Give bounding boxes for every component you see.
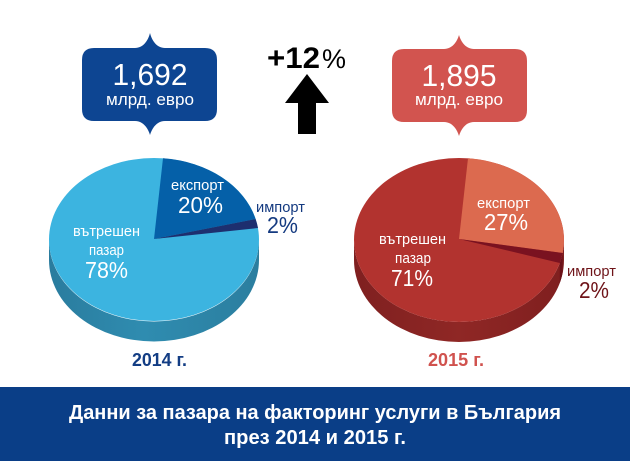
label: import 2%: 2%: [579, 277, 609, 303]
callout: 2015 value: 1,895: [422, 58, 496, 93]
label: export 20%: [171, 178, 224, 218]
label: domestic market 71%: 71%: [391, 265, 433, 291]
label: import 2%: [567, 264, 616, 303]
footer title: през 2014 и 2015 г.: [224, 427, 406, 449]
footer banner: [0, 387, 630, 461]
growth figure: [267, 42, 346, 75]
pie chart: 2014: [49, 158, 305, 341]
callout: 2014 value: млрд. евро: [106, 90, 194, 109]
label: domestic market 78%: вътрешен: [73, 224, 140, 240]
label: import 2%: импорт: [567, 264, 616, 280]
year label: 2015: 2015 г.: [428, 350, 484, 370]
growth figure: +12: [267, 42, 320, 75]
label: import 2%: [256, 200, 305, 238]
label: export 20%: експорт: [171, 178, 224, 194]
label: export 27%: експорт: [477, 196, 530, 212]
footer title: Данни за пазара на факторинг услуги в България: [69, 402, 561, 424]
label: domestic market 71%: [379, 232, 446, 291]
label: domestic market 78%: [73, 224, 140, 283]
label: export 27%: [477, 196, 530, 235]
label: export 20%: 20%: [178, 192, 223, 218]
label: domestic market 78%: пазар: [89, 243, 124, 259]
label: domestic market 71%: пазар: [395, 251, 431, 267]
callout: 2015 value: [392, 35, 527, 136]
footer title: [69, 402, 561, 449]
label: export 27%: 27%: [484, 209, 528, 235]
label: domestic market 71%: вътрешен: [379, 232, 446, 248]
callout: 2014 value: [82, 33, 217, 135]
label: import 2%: 2%: [267, 212, 298, 238]
year label: 2014: 2014 г.: [132, 350, 187, 370]
label: import 2%: импорт: [256, 200, 305, 216]
label: domestic market 78%: 78%: [85, 257, 128, 283]
growth figure: %: [322, 44, 346, 74]
callout: 2015 value: млрд. евро: [415, 90, 503, 109]
pie chart: 2015: [354, 158, 616, 342]
callout: 2014 value: 1,692: [112, 57, 188, 92]
icon: up arrow: [285, 74, 329, 134]
